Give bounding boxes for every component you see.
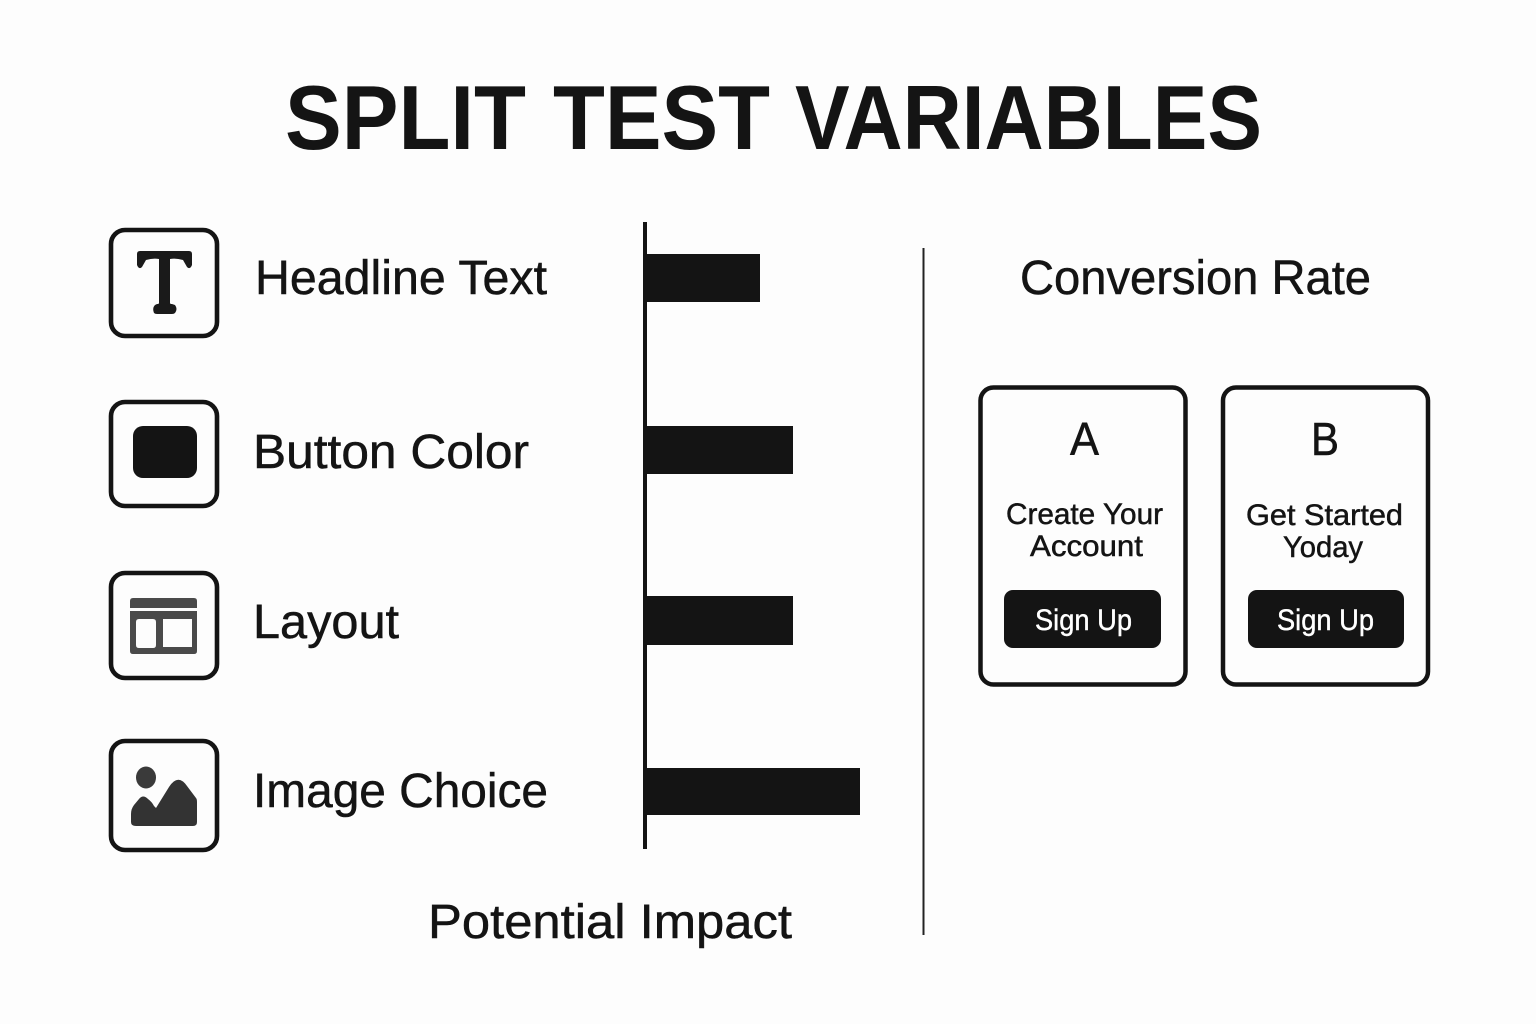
- copy: Get Started Yoday: Get Started: [1246, 499, 1403, 532]
- icon: filled button: [111, 402, 217, 506]
- label: Layout: Layout: [253, 596, 399, 649]
- variable row: image choice: [111, 741, 548, 850]
- label: Image Choice: Image Choice: [253, 765, 548, 818]
- button: Sign Up: Sign Up: [1277, 604, 1374, 637]
- variable row: headline text: [111, 230, 547, 336]
- panel: variant B: [1223, 388, 1428, 684]
- bar: headline text: [646, 254, 760, 302]
- variant letter B: B: [1311, 413, 1339, 465]
- panel: variant A: [980, 388, 1186, 684]
- copy: Get Started Yoday: Yoday: [1283, 531, 1363, 564]
- copy: Create Your Account: [1006, 498, 1163, 563]
- icon: page layout: [111, 573, 217, 678]
- bar: layout: [646, 596, 793, 645]
- axis label: Potential Impact: Potential Impact: [428, 896, 792, 949]
- button: Sign Up: [1004, 590, 1161, 648]
- title: TEST: [553, 68, 770, 169]
- bar: image choice: [646, 768, 860, 815]
- variable row: layout: [111, 573, 399, 678]
- label: Button Color: Button Color: [253, 426, 529, 479]
- chart axis: [643, 222, 647, 849]
- icon: image with mountains: [111, 741, 217, 850]
- copy: Get Started Yoday: [1246, 499, 1403, 564]
- title: SPLIT: [285, 68, 526, 169]
- button: Sign Up: [1248, 590, 1404, 648]
- bar: button color: [646, 426, 793, 474]
- icon: letter T: [111, 230, 217, 336]
- bar chart: potential impact: [643, 222, 860, 849]
- variant letter A: A: [1070, 413, 1099, 465]
- copy: Create Your Account: Account: [1030, 530, 1144, 563]
- heading: Conversion Rate: Conversion Rate: [1020, 252, 1371, 305]
- title: VARIABLES: [795, 68, 1262, 169]
- label: Headline Text: Headline Text: [255, 252, 547, 305]
- button: Sign Up: Sign Up: [1035, 604, 1132, 637]
- variable row: button color: [111, 402, 529, 506]
- title: [285, 68, 1262, 169]
- copy: Create Your Account: Create Your: [1006, 498, 1163, 531]
